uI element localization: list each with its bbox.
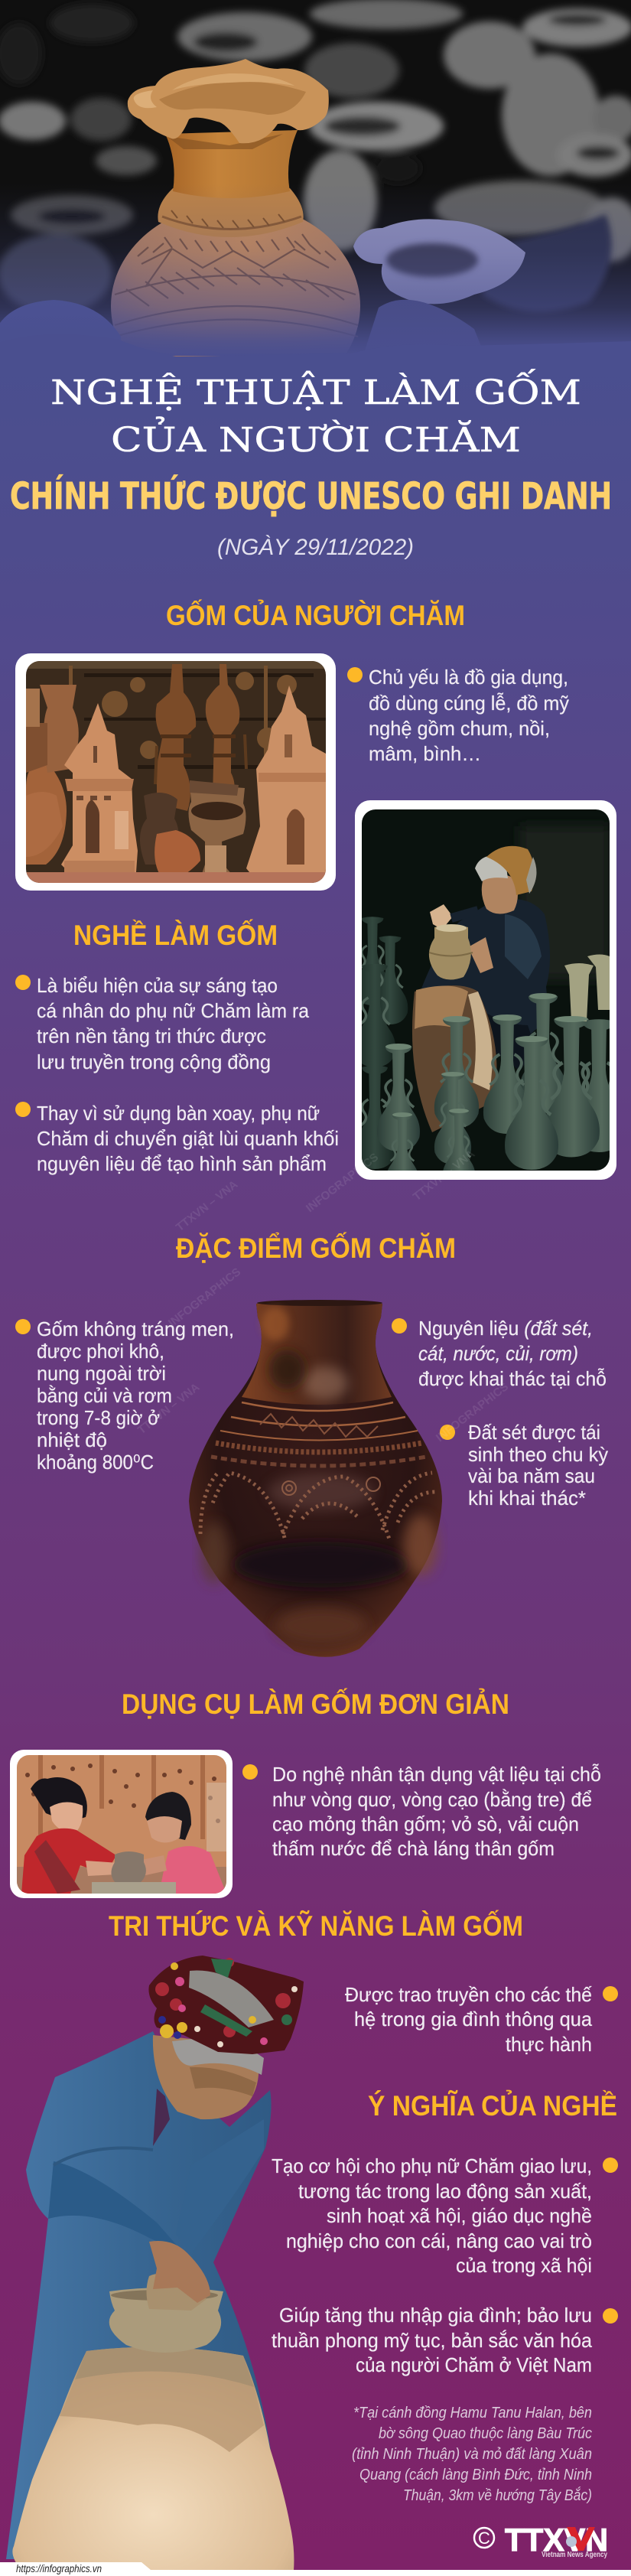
dim vases on the left bbox=[362, 917, 408, 1169]
panel: pottery collection photo bbox=[15, 653, 336, 891]
pale blue pot on the right bbox=[353, 212, 615, 343]
footnote bbox=[352, 2405, 592, 2504]
bullet text: social meaning: Tạo cơ hội cho phụ nữ Chăm giao lưu, bbox=[272, 2154, 592, 2177]
heading: tri thức và kỹ năng: TRI THỨC VÀ KỸ NĂNG LÀM GỐM bbox=[109, 1910, 523, 1942]
bullet text: pottery uses: mâm, bình… bbox=[369, 742, 481, 765]
logo: TTXVN: C bbox=[478, 2529, 490, 2548]
bullet text: clay regeneration: sinh theo chu kỳ bbox=[468, 1443, 608, 1466]
bullet text: tools: như vòng quơ, vòng cạo (bằng tre) để bbox=[272, 1788, 592, 1811]
hands and clay bbox=[147, 2274, 207, 2311]
date: (NGÀY 29/11/2022) bbox=[217, 535, 414, 560]
terracotta vase bbox=[111, 59, 360, 357]
bullet text: materials bbox=[392, 1317, 607, 1390]
bullet text: creativity: lưu truyền trong cộng đồng bbox=[37, 1050, 271, 1073]
bullet text: income and culture: Giúp tăng thu nhập gia đình; bảo lưu bbox=[279, 2304, 592, 2327]
heading: nghề làm gốm: NGHỀ LÀM GỐM bbox=[73, 919, 278, 951]
watermarks: INFOGRAPHICS bbox=[304, 1151, 381, 1215]
bullet text: creativity bbox=[15, 974, 310, 1073]
heading: gốm của người chăm: GỐM CỦA NGƯỜI CHĂM bbox=[166, 599, 465, 631]
watermarks: TTXVN – VNA bbox=[174, 1178, 240, 1234]
center columns bbox=[156, 664, 196, 811]
bullet text: firing: khoảng 800⁰C bbox=[37, 1451, 154, 1474]
bullet text: firing bbox=[15, 1317, 234, 1474]
bullet text: clay regeneration: khi khai thác* bbox=[468, 1487, 586, 1509]
bullet text: creativity: Là biểu hiện của sự sáng tạo bbox=[37, 974, 278, 997]
footnote: Thuận, 3km về hướng Tây Bắc) bbox=[403, 2486, 592, 2504]
clay pot being shaped bbox=[429, 925, 471, 980]
bullet text: method: Chăm di chuyển giật lùi quanh khối bbox=[37, 1127, 339, 1150]
bullet text: firing: bằng củi và rơm bbox=[37, 1384, 172, 1407]
bullet text: social meaning: tương tác trong lao động sản xuất, bbox=[298, 2180, 592, 2203]
bullet text: firing: được phơi khô, bbox=[37, 1340, 164, 1363]
bullet text: method: Thay vì sử dụng bàn xoay, phụ nữ bbox=[37, 1102, 320, 1125]
bullet text: tools bbox=[242, 1763, 601, 1860]
dark decorated vase bbox=[189, 1300, 442, 1657]
bullet text: pottery uses: đồ dùng cúng lễ, đồ mỹ bbox=[369, 692, 569, 715]
bullet text: tools: Do nghệ nhân tận dụng vật liệu tại chỗ bbox=[272, 1763, 601, 1786]
bullet text: transmission: hệ trong gia đình thông qua bbox=[354, 2008, 593, 2031]
footnote: *Tại cánh đồng Hamu Tanu Halan, bên bbox=[353, 2405, 592, 2421]
big jar bbox=[412, 985, 497, 1132]
bullet text: materials: cát, nước, củi, rơm) bbox=[418, 1342, 578, 1365]
head and turban bbox=[153, 2035, 259, 2119]
bullet text: creativity: trên nền tảng tri thức được bbox=[37, 1024, 266, 1047]
panel: elderly potter photo bbox=[354, 800, 626, 1195]
large jar bbox=[12, 2347, 294, 2571]
bullet text: transmission: Được trao truyền cho các thế bbox=[345, 1983, 593, 2006]
woman bbox=[31, 1777, 87, 1822]
bullet text: materials: được khai thác tại chỗ bbox=[418, 1367, 607, 1390]
bullet text: social meaning bbox=[272, 2154, 618, 2277]
logo: TTXVN: TTXVN bbox=[505, 2522, 608, 2558]
title: CỦA NGƯỜI CHĂM bbox=[111, 415, 521, 460]
bullet text: social meaning: nghiệp cho con cái, nâng cao vai trò bbox=[286, 2229, 592, 2252]
bullet text: tools: thấm nước để chà láng thân gốm bbox=[272, 1837, 555, 1860]
source bar bbox=[0, 2562, 631, 2576]
hero photo: terracotta pots bbox=[0, 0, 631, 357]
bullet text: tools: cạo mỏng thân gốm; vỏ sò, vải cuộn bbox=[272, 1812, 579, 1835]
title bbox=[50, 368, 581, 460]
watermarks: TTXVN – VNA bbox=[411, 1148, 477, 1203]
bullet text: creativity: cá nhân do phụ nữ Chăm làm ra bbox=[37, 999, 310, 1022]
bullet text: income and culture: của người Chăm ở Việt Nam bbox=[356, 2353, 592, 2376]
bullet text: pottery uses: Chủ yếu là đồ gia dụng, bbox=[369, 666, 568, 689]
teal vases bbox=[381, 996, 610, 1171]
left tower bbox=[61, 703, 138, 880]
foreground pots fading to purple bbox=[0, 300, 121, 343]
bullet text: materials: Nguyên liệu (đất sét, bbox=[418, 1317, 593, 1340]
bullet text: clay regeneration: vài ba năm sau bbox=[468, 1464, 595, 1487]
bullet text: method bbox=[15, 1102, 339, 1175]
bullet text: clay regeneration bbox=[440, 1421, 608, 1509]
bullet text: firing: Gốm không tráng men, bbox=[37, 1317, 234, 1340]
heading: dụng cụ làm gốm đơn giản: DỤNG CỤ LÀM GỐM ĐƠN GIẢN bbox=[122, 1688, 509, 1720]
right tower bbox=[246, 686, 326, 881]
bullet text: transmission bbox=[345, 1983, 618, 2056]
footnote: (tỉnh Ninh Thuận) và mỏ đất làng Xuân bbox=[352, 2446, 592, 2463]
bullet text: firing: nung ngoài trời bbox=[37, 1362, 166, 1385]
bullet text: firing: trong 7-8 giờ ở bbox=[37, 1406, 160, 1429]
bullet text: social meaning: của trong xã hội bbox=[456, 2254, 592, 2277]
left jars bbox=[26, 685, 79, 865]
girl bbox=[145, 1792, 191, 1840]
bullet text: firing: nhiệt độ bbox=[37, 1428, 107, 1451]
logo: TTXVN: Vietnam News Agency bbox=[542, 2551, 607, 2559]
source bar: https://infographics.vn bbox=[16, 2563, 102, 2574]
bullet text: clay regeneration: Đất sét được tái bbox=[468, 1421, 600, 1444]
footnote: bờ sông Quao thuộc làng Bàu Trúc bbox=[379, 2425, 592, 2442]
title: NGHỆ THUẬT LÀM GỐM bbox=[50, 368, 581, 412]
bullet text: social meaning: sinh hoạt xã hội, giáo dục nghề bbox=[327, 2204, 592, 2227]
heading: đặc điểm gốm chăm: ĐẶC ĐIỂM GỐM CHĂM bbox=[176, 1232, 456, 1264]
bullet text: transmission: thực hành bbox=[506, 2033, 592, 2056]
footnote: Quang (cách làng Bình Đức, tỉnh Ninh bbox=[359, 2467, 592, 2483]
watermarks bbox=[135, 1148, 511, 1444]
small pots bbox=[140, 793, 179, 865]
bullet text: income and culture: thuần phong mỹ tục, bản sắc văn hóa bbox=[272, 2329, 593, 2352]
bullet text: pottery uses bbox=[347, 666, 569, 765]
clay pot bbox=[111, 1851, 146, 1884]
watermarks: INFOGRAPHICS bbox=[166, 1265, 243, 1330]
bullet text: pottery uses: nghệ gồm chum, nồi, bbox=[369, 717, 550, 740]
basin bbox=[188, 784, 246, 878]
woman bbox=[419, 846, 550, 1071]
elderly woman with large clay jar bbox=[6, 1956, 304, 2571]
watermarks: TTXVN – VNA bbox=[135, 1381, 202, 1437]
watermarks: INFOGRAPHICS bbox=[434, 1380, 511, 1444]
small pot bbox=[109, 2288, 223, 2353]
panel: mother and daughter photo bbox=[10, 1750, 233, 1898]
bullet text: income and culture bbox=[272, 2304, 618, 2376]
bullet text: method: nguyên liệu để tạo hình sản phẩm bbox=[37, 1152, 327, 1175]
